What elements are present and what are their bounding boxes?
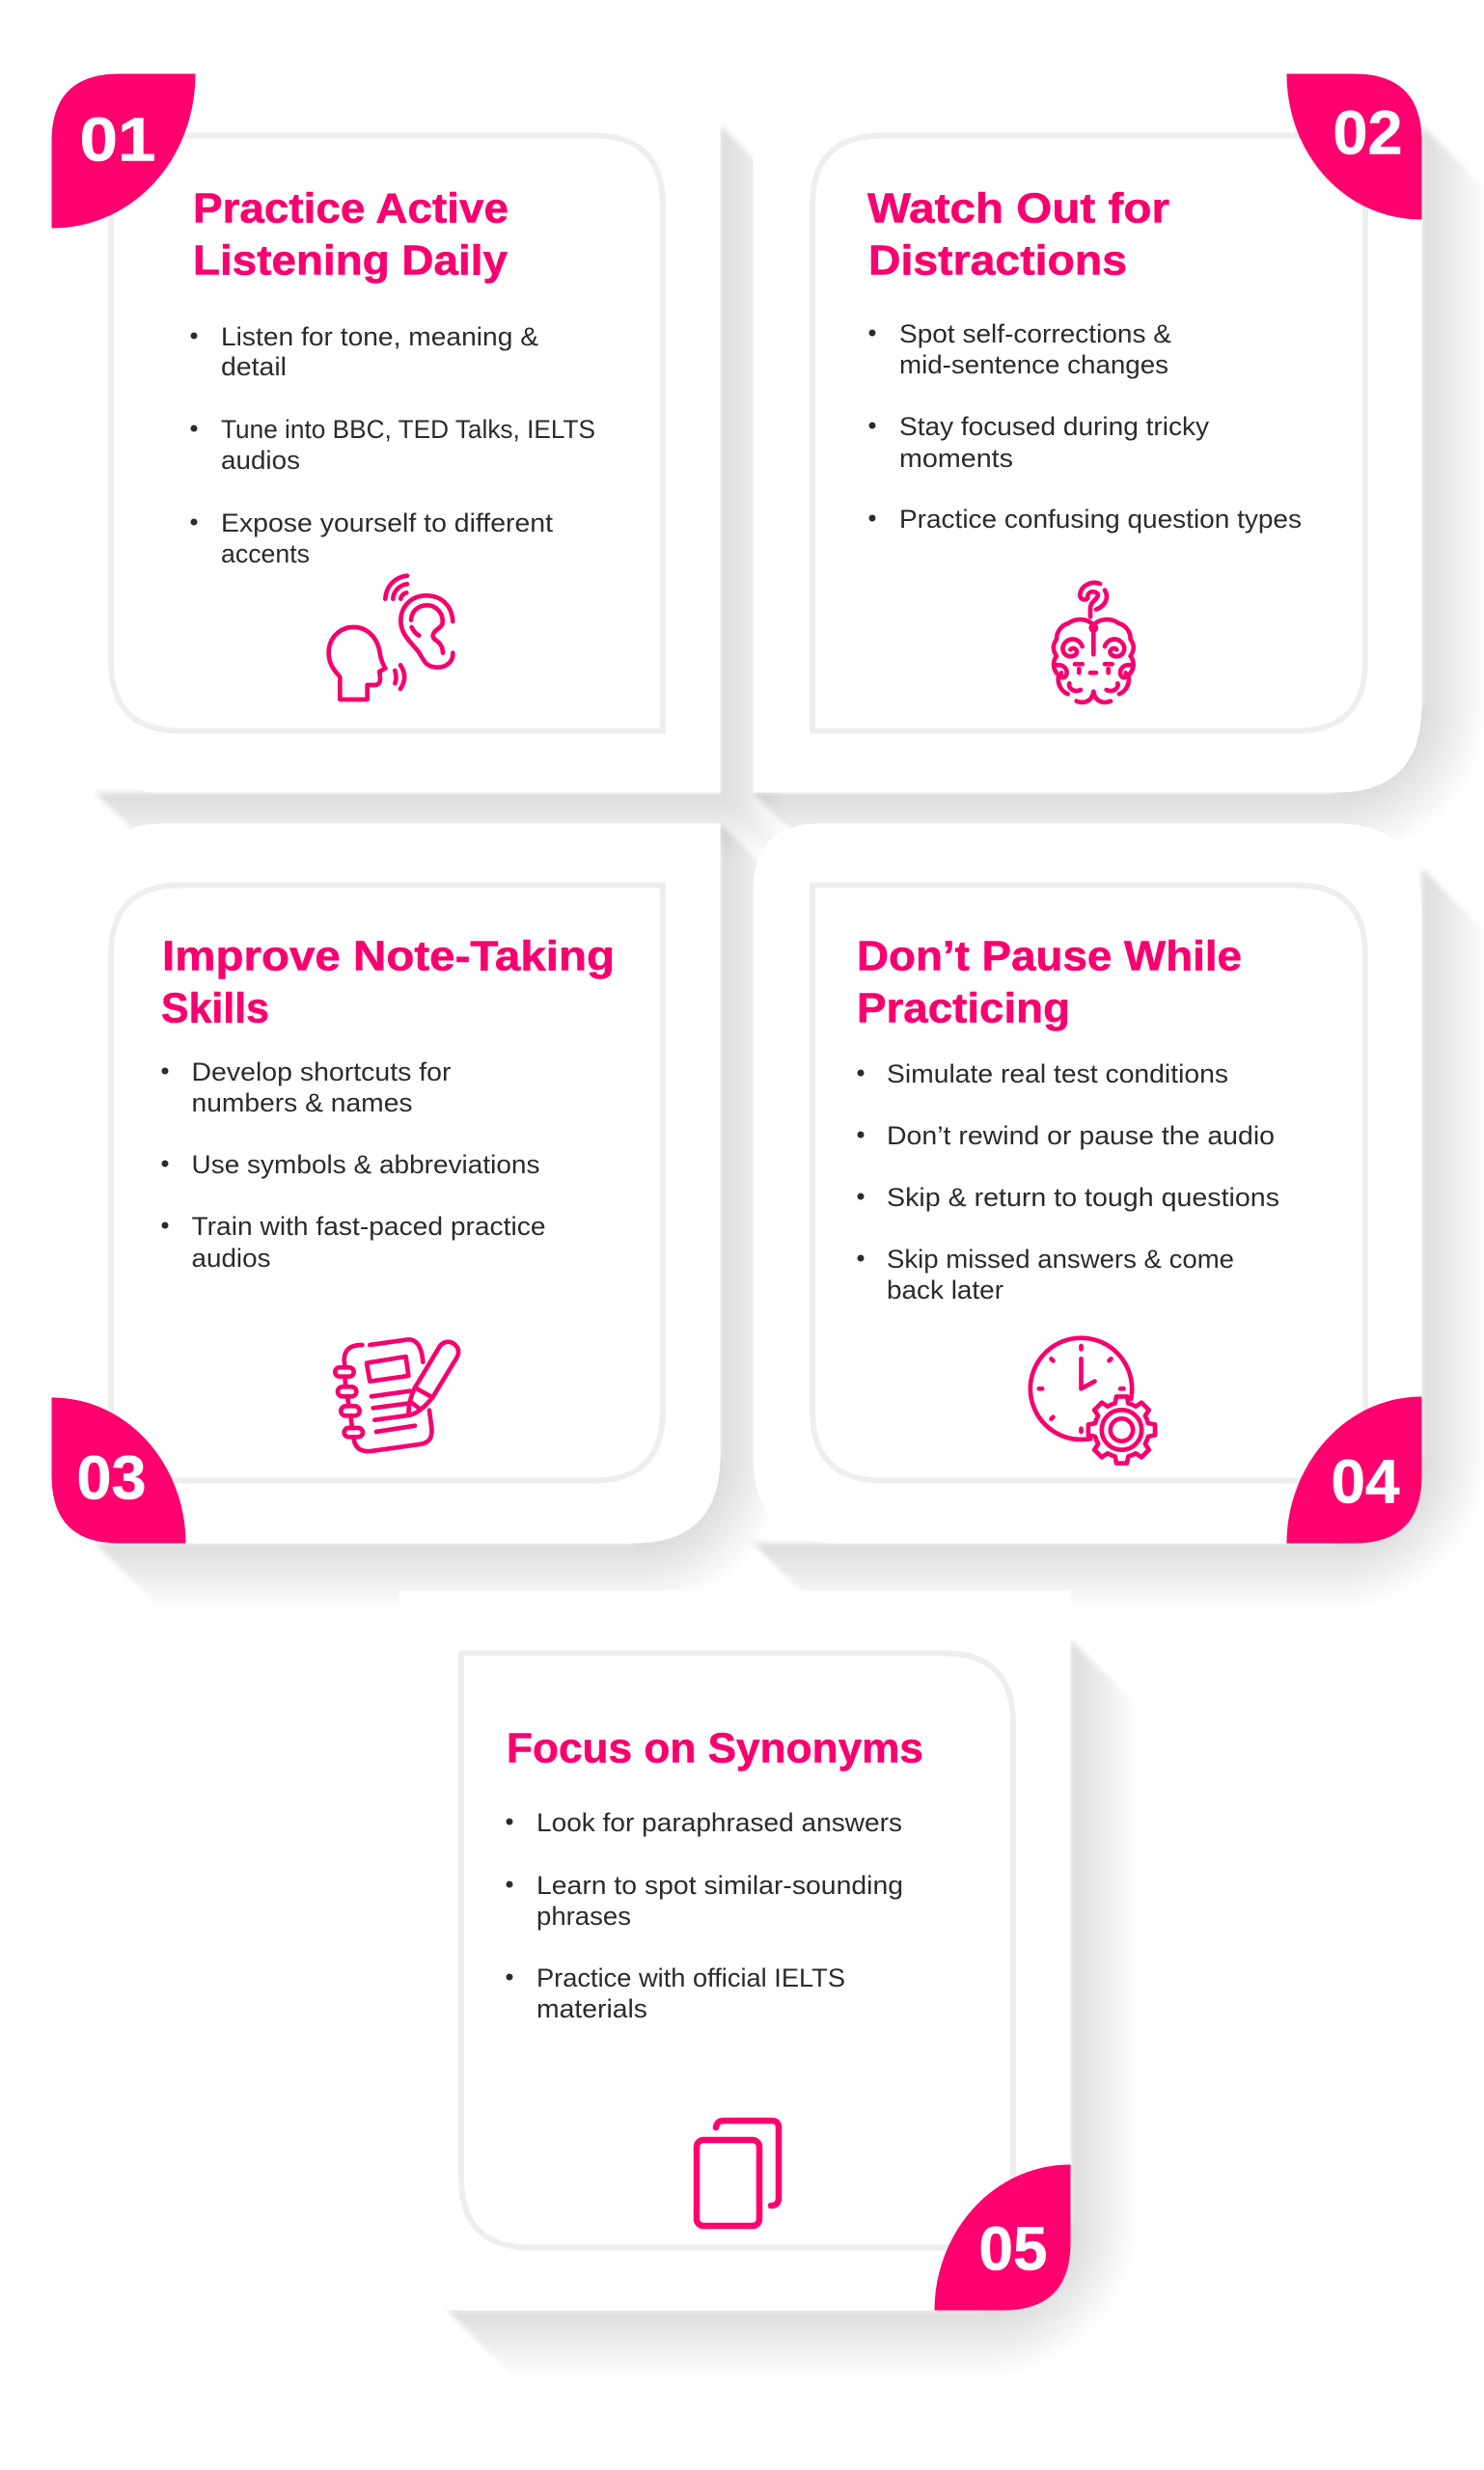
bullet list: Look for paraphrased answers [536, 1808, 902, 1837]
bullet list: Skip & return to tough questions [887, 1183, 1279, 1212]
bullet list [191, 322, 595, 568]
heading: improve note-taking skills: Skills [161, 984, 269, 1032]
badge: 03 [52, 1397, 185, 1544]
heading: focus on synonyms: Focus on Synonyms [507, 1725, 923, 1771]
heading: watch out for distractions [867, 185, 1169, 284]
bullet list: Listen for tone, meaning & [221, 322, 538, 351]
badge: 05 [934, 2165, 1071, 2310]
badge: 01 [52, 73, 195, 228]
panel: card 02 watch out for distractions [753, 73, 1422, 793]
panel: card 05 focus on synonyms [399, 1590, 1071, 2310]
panel: card 01 practice active listening [52, 73, 720, 793]
heading: practice active listening daily: Listening Daily [193, 237, 508, 284]
panel: card 04 don't pause while practicing [753, 824, 1422, 1544]
icon: brain with question mark [1054, 583, 1134, 702]
bullet list: Train with fast-paced practice [191, 1212, 546, 1241]
bullet list [162, 1057, 546, 1273]
bullet list: moments [899, 444, 1013, 473]
heading: don't pause while practicing [857, 932, 1242, 1032]
bullet list: Use symbols & abbreviations [191, 1150, 540, 1179]
bullet list: Don’t rewind or pause the audio [887, 1121, 1275, 1150]
heading: watch out for distractions: Watch Out for [867, 185, 1169, 232]
bullet list: Expose yourself to different [221, 508, 554, 537]
bullet list: phrases [536, 1902, 631, 1931]
badge: 05: 05 [978, 2213, 1048, 2283]
heading: improve note-taking skills: Improve Note-Taking [162, 932, 615, 980]
bullet list: Spot self-corrections & [899, 319, 1171, 348]
bullet list [857, 1059, 1279, 1304]
heading: improve note-taking skills [161, 932, 615, 1032]
bullet list: numbers & names [191, 1088, 413, 1117]
bullet list [868, 319, 1302, 534]
bullet list: Practice confusing question types [899, 505, 1302, 534]
bullet list: audios [221, 446, 300, 475]
bullet list: mid-sentence changes [899, 350, 1168, 379]
bullet list: Learn to spot similar-sounding [536, 1871, 903, 1900]
bullet list: detail [221, 352, 287, 381]
badge: 01: 01 [79, 104, 156, 174]
badge: 02: 02 [1333, 98, 1403, 168]
icon: stacked documents [697, 2121, 779, 2226]
badge: 02 [1287, 73, 1422, 220]
bullet list: Stay focused during tricky [899, 412, 1210, 441]
heading: practice active listening daily [193, 185, 508, 284]
heading: watch out for distractions: Distractions [868, 237, 1127, 284]
bullet list: Develop shortcuts for [191, 1057, 452, 1086]
bullet list: Simulate real test conditions [887, 1059, 1228, 1088]
heading: don't pause while practicing: Don’t Pause While [857, 932, 1242, 980]
heading: don't pause while practicing: Practicing [857, 984, 1070, 1032]
bullet list: Skip missed answers & come [887, 1245, 1234, 1274]
bullet list: back later [887, 1276, 1003, 1304]
bullet list: materials [536, 1994, 647, 2023]
icon: clock with gear [1031, 1338, 1155, 1464]
bullet list: audios [191, 1244, 270, 1273]
icon: notebook and pencil [335, 1339, 458, 1451]
bullet list: Tune into BBC, TED Talks, IELTS [221, 415, 595, 444]
badge: 03: 03 [77, 1443, 147, 1513]
icon: head speaking and ear listening [329, 576, 453, 700]
panel: card 03 improve note-taking skills [52, 824, 720, 1544]
bullet list: Practice with official IELTS [536, 1963, 845, 1992]
heading: practice active listening daily: Practice Active [193, 185, 508, 232]
bullet list [506, 1808, 903, 2023]
badge: 04: 04 [1332, 1447, 1400, 1517]
badge: 04 [1287, 1397, 1422, 1544]
bullet list: accents [221, 539, 310, 568]
